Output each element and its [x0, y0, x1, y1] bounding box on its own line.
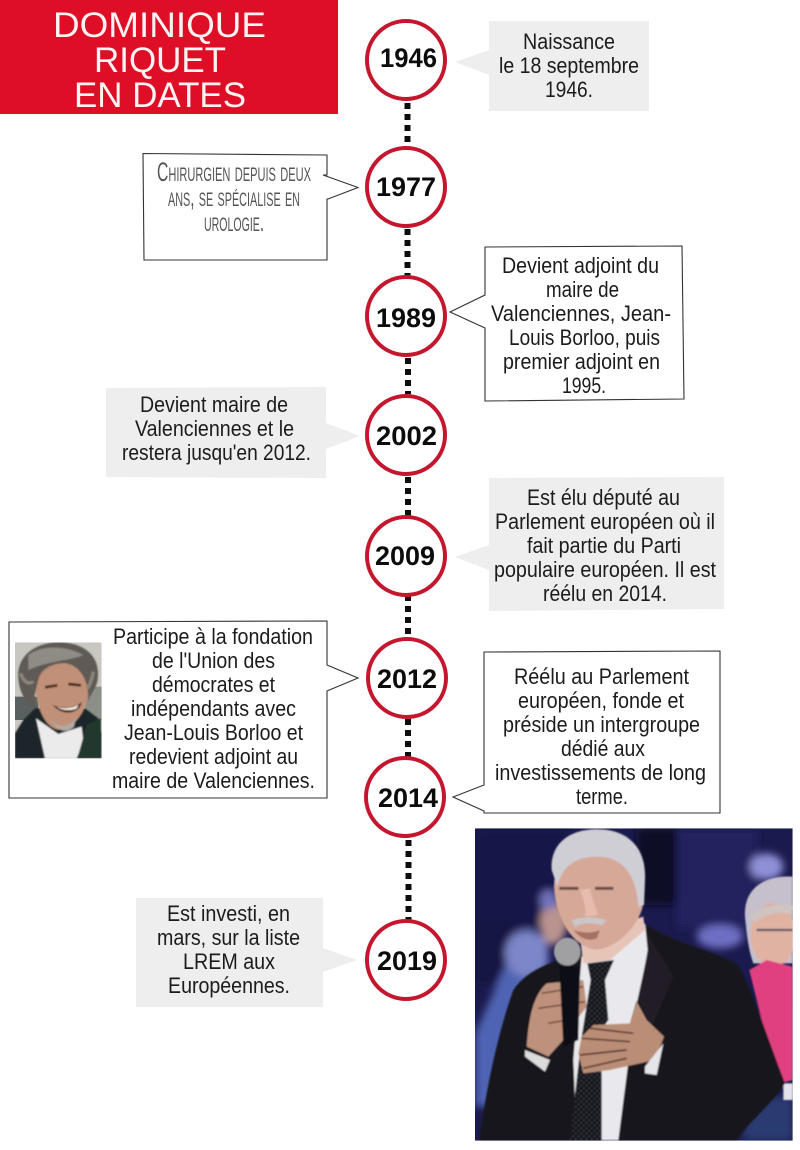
title banner — [0, 0, 338, 115]
callout: 1989 deputy mayor: Devient adjoint du — [502, 253, 659, 278]
year marker: 2012: 2012 — [377, 664, 437, 694]
callout: 2019 LREM: mars, sur la liste — [157, 925, 300, 950]
photo: Dominique Riquet speaking into a microphone — [475, 828, 796, 1141]
neck and face — [580, 917, 645, 963]
year marker: 2014 — [366, 758, 444, 836]
year marker: 2009 — [367, 517, 445, 595]
callout: 2014 re-election — [453, 651, 720, 813]
year marker: 2002 — [367, 396, 445, 474]
callout: 1977 surgeon — [143, 154, 358, 260]
callout: 2012 UDI: Participe à la fondation — [113, 624, 313, 649]
title banner: RIQUET — [94, 41, 226, 80]
year marker: 2014: 2014 — [378, 783, 438, 813]
callout: 1989 deputy mayor: 1995. — [562, 373, 606, 398]
callout: 1946 birth: 1946. — [545, 77, 593, 102]
year marker: 2019 — [367, 921, 445, 999]
callout: 2002 mayor: restera jusqu'en 2012. — [122, 440, 311, 465]
callout: 2012 UDI: redevient adjoint au — [129, 744, 298, 769]
callout: 2012 UDI — [9, 621, 358, 798]
callout: 1989 deputy mayor — [450, 246, 684, 401]
year marker: 1946: 1946 — [380, 43, 437, 73]
year marker: 1977 — [367, 148, 445, 226]
callout: 1977 surgeon: Chirurgien depuis deux — [157, 157, 311, 187]
callout: 2009 MEP: populaire européen. Il est — [494, 557, 716, 582]
title banner: DOMINIQUE — [53, 6, 266, 45]
callout: 2009 MEP: fait partie du Parti — [527, 533, 681, 558]
callout: 2014 re-election: dédié aux — [561, 736, 645, 761]
callout: 2002 mayor: Devient maire de — [140, 392, 288, 417]
callout: 2002 mayor: Valenciennes et le — [135, 416, 294, 441]
year marker: 2012 — [368, 639, 446, 717]
callout: 1977 surgeon: ans, se spécialise en — [168, 182, 300, 212]
callout: 1989 deputy mayor: maire de — [546, 277, 619, 302]
hand on chest — [578, 1002, 664, 1073]
callout: 2012 UDI: démocrates et — [152, 672, 275, 697]
callout: 2014 re-election: préside un intergroupe — [503, 712, 700, 737]
callout: 2009 MEP: réélu en 2014. — [543, 581, 667, 606]
callout: 2019 LREM: LREM aux — [183, 949, 275, 974]
callout: 2014 re-election: terme. — [576, 784, 628, 809]
year marker: 2009: 2009 — [375, 541, 435, 571]
photo: portrait of Jean-Louis Borloo — [15, 642, 102, 758]
callout: 2014 re-election: européen, fonde et — [518, 688, 684, 713]
callout: 2019 LREM — [136, 898, 357, 1007]
suit — [480, 925, 785, 1141]
callout: 2019 LREM: Est investi, en — [167, 901, 290, 926]
callout: 1989 deputy mayor: Valenciennes, Jean- — [491, 301, 671, 326]
callout: 1946 birth — [455, 21, 649, 111]
callout: 1946 birth: le 18 septembre — [499, 53, 639, 78]
title banner: EN DATES — [74, 76, 246, 115]
hair — [552, 829, 645, 907]
callout: 1989 deputy mayor: premier adjoint en — [503, 349, 660, 374]
shirt — [573, 923, 648, 1140]
timeline dotted connector — [408, 103, 409, 920]
callout: 2009 MEP: Est élu député au — [527, 485, 680, 510]
tie — [570, 960, 614, 1141]
callout: 2012 UDI: indépendants avec — [131, 696, 296, 721]
year marker: 1989: 1989 — [376, 303, 436, 333]
raised hand with cuff — [525, 1050, 550, 1072]
callout: 2009 MEP: Parlement européen où il — [495, 509, 715, 534]
microphone — [559, 967, 580, 1047]
year marker: 1946 — [367, 21, 445, 99]
year marker: 1989 — [367, 277, 445, 355]
background woman — [745, 877, 793, 963]
callout: 1989 deputy mayor: Louis Borloo, puis — [509, 325, 660, 350]
callout: 1977 surgeon: urologie. — [204, 207, 264, 237]
callout: 2012 UDI: maire de Valenciennes. — [112, 768, 315, 793]
callout: 2012 UDI: Jean-Louis Borloo et — [124, 720, 303, 745]
callout: 2014 re-election: Réélu au Parlement — [514, 664, 689, 689]
callout: 2019 LREM: Européennes. — [168, 973, 290, 998]
callout: 2014 re-election: investissements de long — [495, 760, 706, 785]
year marker: 1977: 1977 — [376, 172, 436, 202]
facial features — [572, 917, 607, 927]
year marker: 2002: 2002 — [376, 421, 437, 451]
callout: 2012 UDI: de l'Union des — [152, 648, 275, 673]
year marker: 2019: 2019 — [377, 946, 437, 976]
callout: 2002 mayor — [106, 387, 360, 478]
callout: 2009 MEP — [455, 477, 724, 611]
callout: 1946 birth: Naissance — [523, 29, 615, 54]
